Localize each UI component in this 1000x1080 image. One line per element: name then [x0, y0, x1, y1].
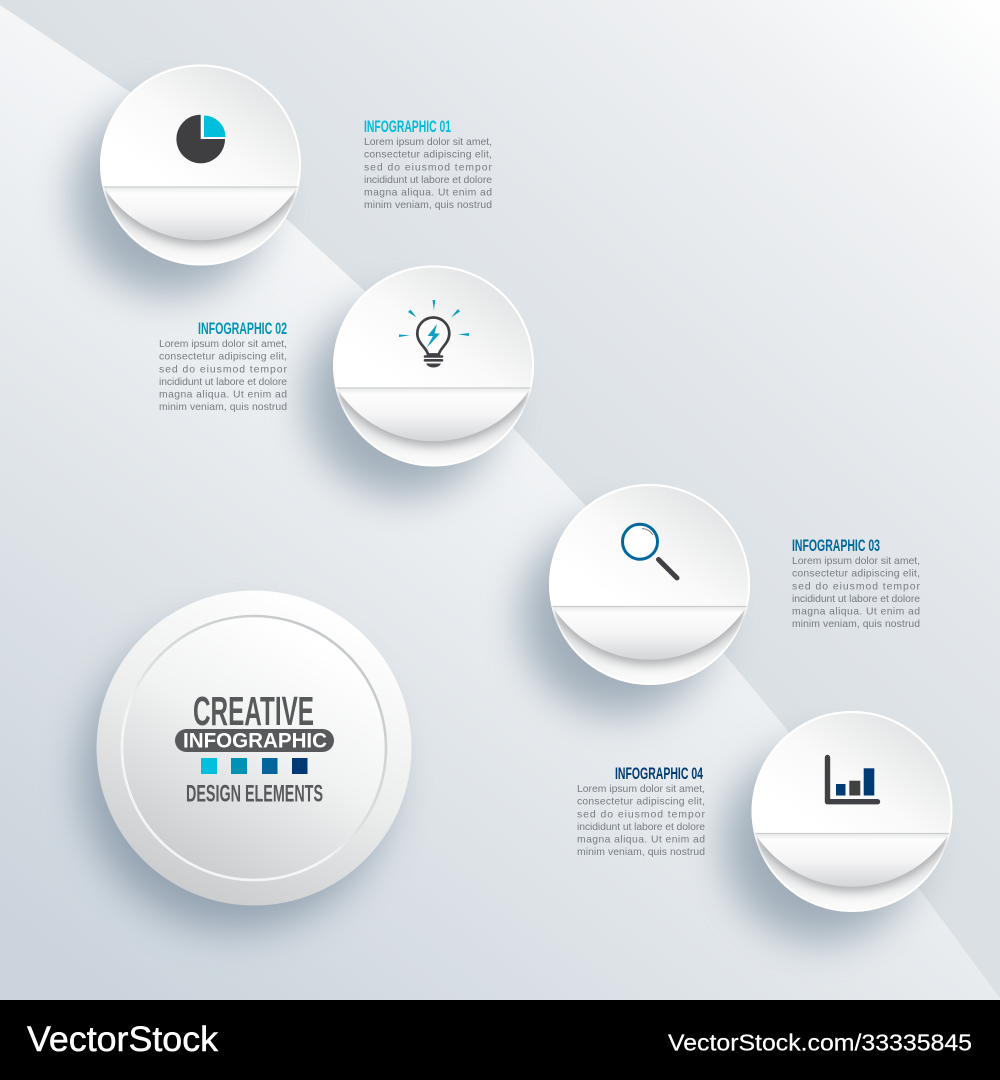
text block 04: incididunt ut labore et dolore — [577, 822, 705, 833]
text block 01: Lorem ipsum dolor sit amet, — [364, 137, 492, 148]
step circle 03 — [522, 484, 750, 714]
text block 03: INFOGRAPHIC 03 — [792, 537, 880, 555]
text block 02: consectetur adipiscing elit, — [159, 352, 287, 363]
text block 04: consectetur adipiscing elit, — [577, 797, 705, 808]
step circle 02 — [306, 266, 534, 496]
icon: pie chart — [176, 115, 226, 163]
text block 02: Lorem ipsum dolor sit amet, — [159, 339, 287, 350]
title: creative: CREATIVE — [193, 688, 314, 734]
text block 01: INFOGRAPHIC 01 — [364, 118, 451, 136]
text block 04: minim veniam, quis nostrud — [577, 847, 705, 858]
footer image id: VectorStock.com/33335845 — [668, 1030, 972, 1056]
text block 01: sed do eiusmod tempor — [364, 162, 493, 174]
large centre circle — [81, 590, 412, 931]
text block 02: minim veniam, quis nostrud — [159, 402, 287, 413]
text block 02: sed do eiusmod tempor — [159, 364, 288, 376]
title pill: infographic: INFOGRAPHIC — [183, 730, 327, 752]
text block 02: incididunt ut labore et dolore — [159, 377, 287, 388]
text block 04: magna aliqua. Ut enim ad — [577, 834, 705, 846]
text block 03: sed do eiusmod tempor — [792, 582, 921, 592]
text block 04: sed do eiusmod tempor — [577, 810, 706, 820]
text block 01: magna aliqua. Ut enim ad — [364, 188, 492, 198]
subtitle: design elements: DESIGN ELEMENTS — [186, 780, 323, 808]
text block 03 — [792, 537, 921, 630]
text block 03: consectetur adipiscing elit, — [792, 569, 920, 580]
step circle 04 — [724, 711, 952, 942]
text block 01: incididunt ut labore et dolore — [364, 175, 492, 186]
text block 03: incididunt ut labore et dolore — [792, 594, 920, 605]
text block 01: consectetur adipiscing elit, — [364, 150, 492, 161]
text block 03: Lorem ipsum dolor sit amet, — [792, 556, 920, 567]
text block 04: Lorem ipsum dolor sit amet, — [577, 784, 705, 795]
text block 04 — [577, 765, 706, 858]
text block 01 — [364, 118, 493, 211]
text block 01: minim veniam, quis nostrud — [364, 200, 492, 211]
text block 02: INFOGRAPHIC 02 — [198, 320, 287, 338]
footer bar — [0, 1000, 1000, 1080]
icon: magnifying glass — [622, 524, 677, 578]
text block 02: magna aliqua. Ut enim ad — [159, 390, 287, 400]
colour squares — [201, 758, 308, 774]
icon: light bulb — [399, 300, 469, 368]
footer logo text: VectorStock — [27, 1020, 219, 1059]
text block 03: minim veniam, quis nostrud — [792, 619, 920, 630]
text block 03: magna aliqua. Ut enim ad — [792, 606, 920, 618]
step circle 01 — [72, 64, 301, 295]
icon: bar chart — [828, 758, 878, 802]
text block 02 — [159, 320, 288, 413]
text block 04: INFOGRAPHIC 04 — [615, 765, 704, 783]
